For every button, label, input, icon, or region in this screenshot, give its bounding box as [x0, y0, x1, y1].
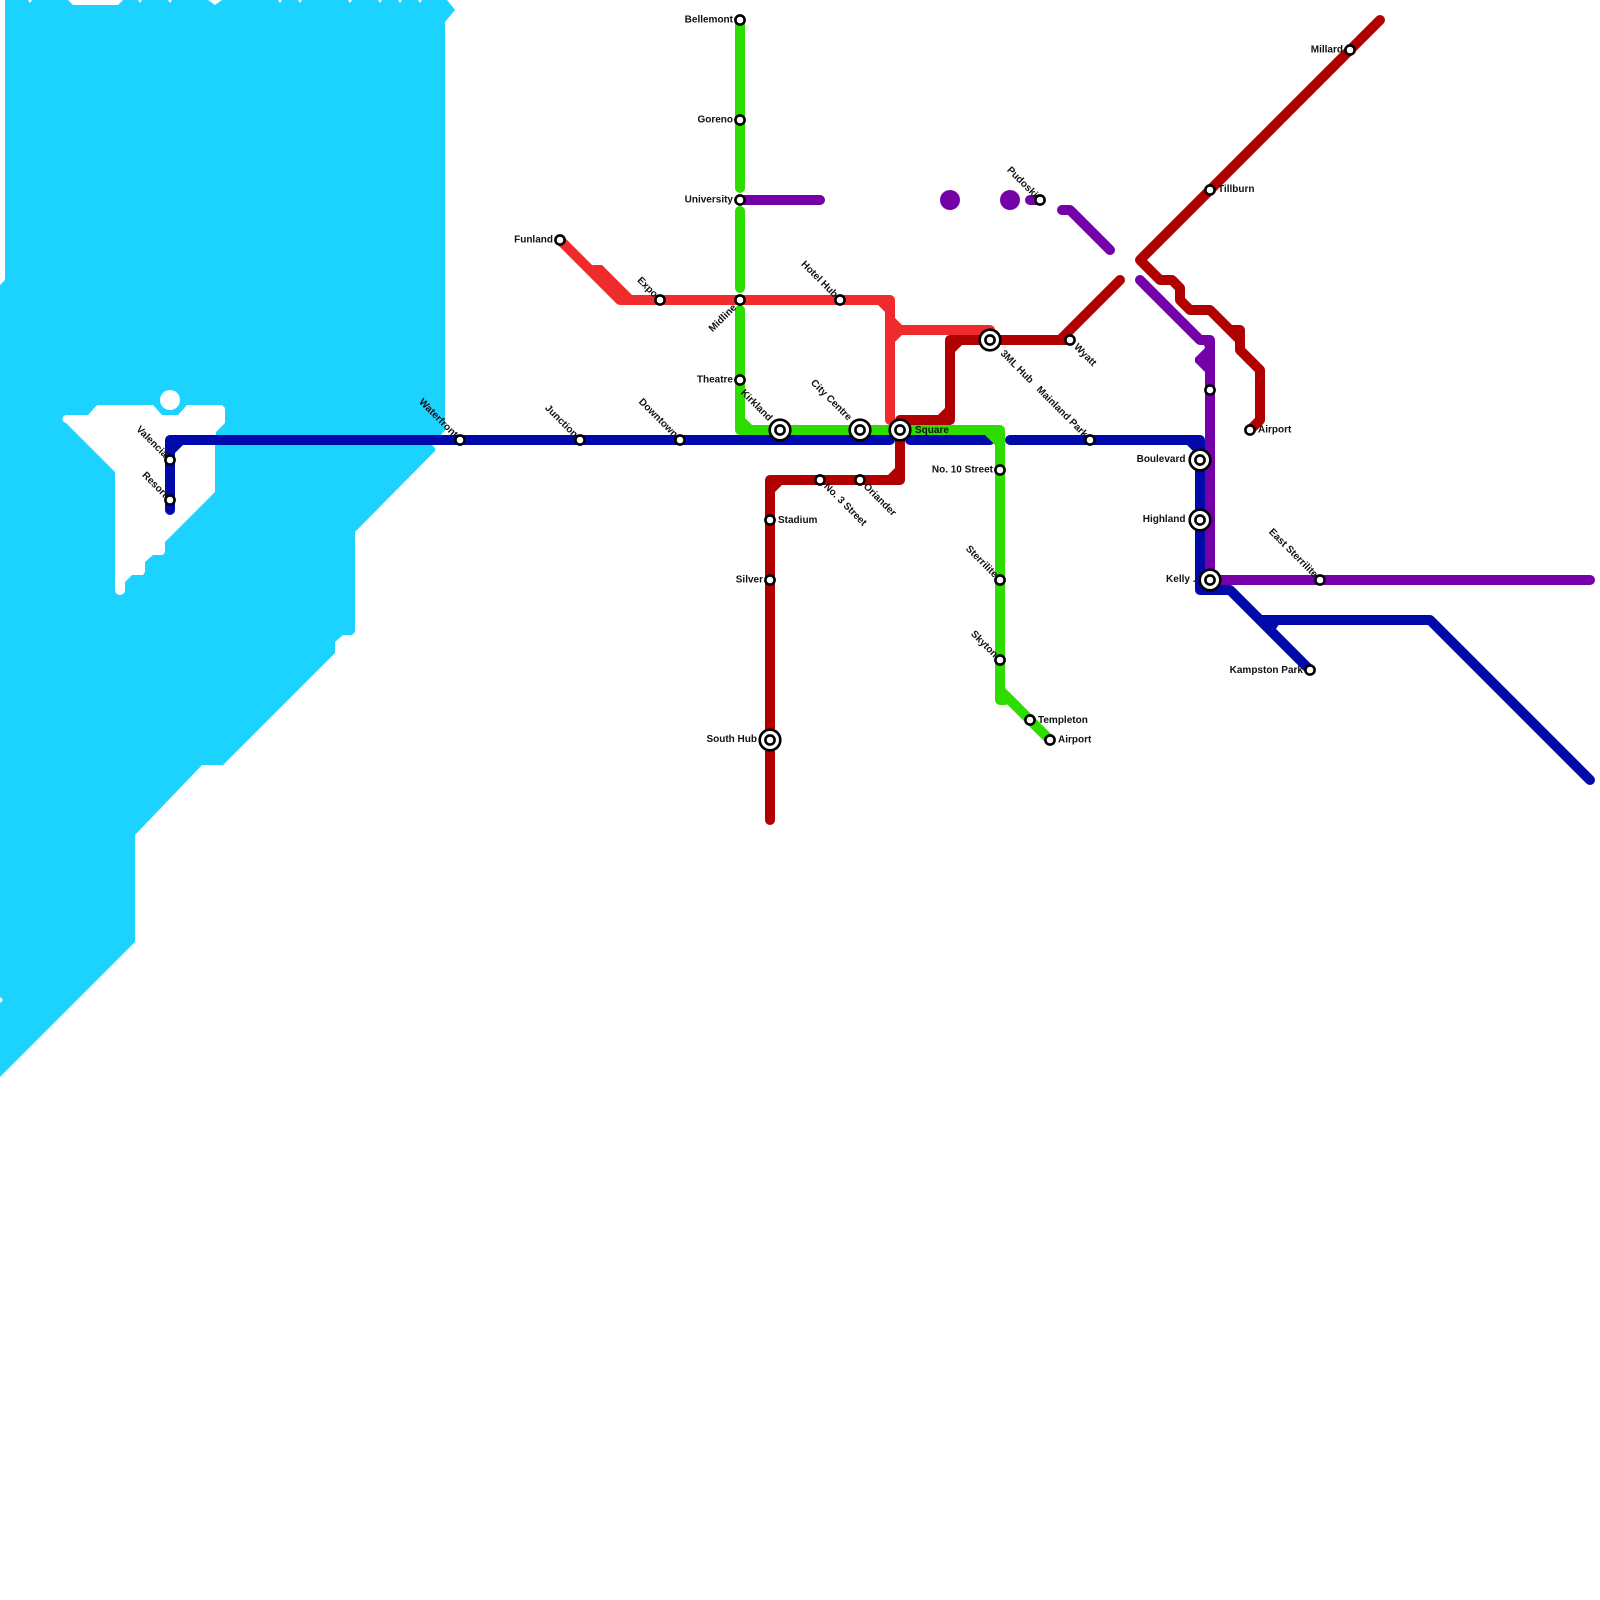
station: Skyton: Skyton	[968, 629, 1000, 660]
station: Downtown: Downtown	[636, 397, 680, 440]
station: Airport east: Airport	[1258, 424, 1292, 436]
station: Hotel Hub: Hotel Hub	[798, 259, 840, 300]
interchange: 3ML Hub: 3ML Hub	[998, 348, 1035, 386]
interchange: City Centre	[808, 378, 870, 440]
station: Waterfront: Waterfront	[416, 397, 460, 441]
station: Valencia: Valencia	[134, 424, 170, 460]
interchange: 3ML Hub	[980, 330, 1035, 386]
station: Goreno: Goreno	[697, 114, 733, 126]
station: Expo: Expo	[635, 275, 660, 300]
station: East Sterrilite: East Sterrilite	[1266, 527, 1320, 580]
station: Kampston Park: Kampston Park	[1230, 665, 1303, 676]
interchange: Highland	[1143, 510, 1210, 530]
station: Midline: Midline	[707, 302, 739, 334]
station: No. 3 Street: No. 3 Street	[821, 481, 869, 529]
station: Stadium: Stadium	[778, 515, 818, 526]
station: unnamed	[1205, 385, 1215, 395]
station: Wyatt: Wyatt	[1071, 342, 1099, 369]
station: Airport south: Airport	[1058, 734, 1092, 746]
station: Funland: Funland	[514, 234, 553, 246]
interchange: Square: Square	[915, 425, 949, 436]
interchange: Highland: Highland	[1143, 514, 1186, 525]
station: No. 10 Street: No. 10 Street	[932, 464, 994, 476]
interchange: Boulevard: Boulevard	[1137, 454, 1186, 465]
interchange: Boulevard	[1137, 450, 1210, 470]
station: Silver: Silver	[736, 574, 763, 586]
station: Millard: Millard	[1311, 44, 1343, 56]
dark red line	[770, 20, 1380, 820]
station: Tillburn: Tillburn	[1218, 184, 1254, 195]
interchange: South Hub	[706, 730, 780, 750]
station: Oriander: Oriander	[861, 481, 898, 519]
purple dot east	[1000, 190, 1020, 210]
station: Sterrilite: Sterrilite	[963, 544, 1000, 580]
interchange: Kelly	[1166, 570, 1220, 590]
interchange: City Centre: City Centre	[808, 378, 854, 423]
interchange: Square	[890, 420, 949, 440]
station: Mainland Park: Mainland Park	[1034, 384, 1090, 440]
station: Wyatt	[1065, 335, 1099, 369]
lake island dot	[160, 390, 180, 410]
water body	[0, 0, 455, 1077]
station: Bellemont: Bellemont	[685, 14, 734, 26]
station: Resort: Resort	[139, 470, 170, 501]
red line	[560, 240, 990, 420]
green line	[740, 20, 1050, 740]
purple dot west	[940, 190, 960, 210]
interchange: Kirkland: Kirkland	[738, 388, 774, 424]
station: Templeton: Templeton	[1038, 715, 1088, 726]
station: Pudoski: Pudoski	[1004, 165, 1040, 200]
station: Theatre: Theatre	[697, 374, 733, 386]
interchange: Kirkland	[738, 388, 790, 440]
stations	[134, 14, 1355, 750]
blue line	[170, 440, 1590, 780]
interchange: South Hub: South Hub	[706, 734, 757, 745]
station: Junction: Junction	[542, 403, 580, 440]
station: University: University	[685, 194, 733, 206]
purple line	[740, 190, 1590, 580]
interchange: Kelly: Kelly .	[1166, 574, 1196, 585]
